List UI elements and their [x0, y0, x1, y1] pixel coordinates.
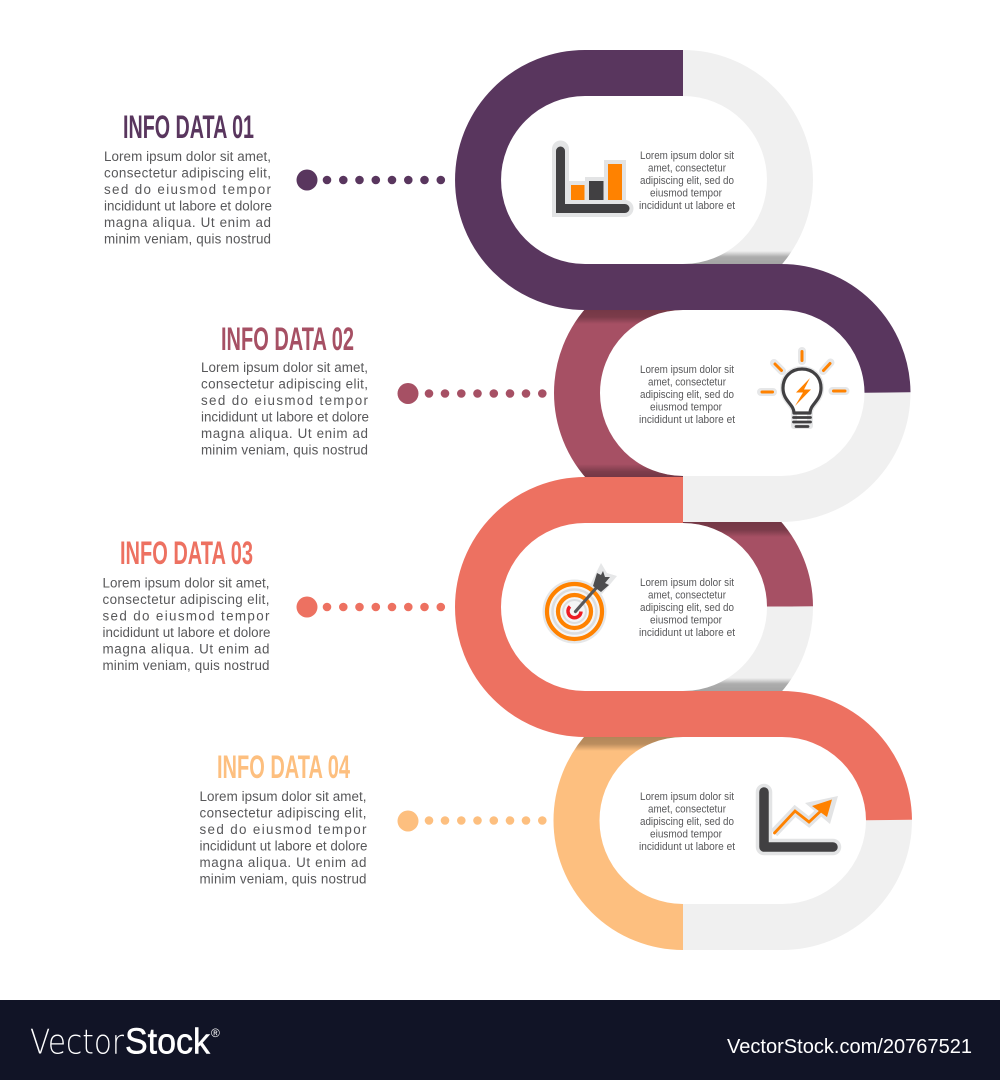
- winding timeline ribbon: [478, 73, 889, 927]
- footer logo bold part: Stock: [125, 1020, 211, 1062]
- description 03: [102, 576, 270, 673]
- body text 4: [639, 791, 735, 853]
- panel: step 4 centre: [639, 791, 838, 853]
- ribbon: peach left arc of step 4: [576, 714, 683, 927]
- description 04: [200, 789, 368, 886]
- description 04: consectetur adipiscing elit,: [200, 806, 366, 820]
- body text 4: amet, consectetur: [648, 804, 726, 816]
- body text 2: Lorem ipsum dolor sit: [640, 364, 734, 376]
- ribbon: grey lower right arc of step 2: [683, 392, 888, 499]
- ribbon: grey lower right arc of step 4: [683, 820, 889, 927]
- dotted connector 01: [296, 170, 445, 190]
- description 03: sed do eiusmod tempor: [102, 608, 270, 624]
- dotted connector 03: [296, 596, 445, 618]
- body text 1: Lorem ipsum dolor sit: [640, 150, 734, 162]
- description 04: sed do eiusmod tempor: [200, 822, 367, 837]
- description 01: [104, 149, 272, 246]
- shadow on rose right arc: [683, 500, 790, 606]
- ribbon: grey right arc of step 3: [683, 606, 790, 714]
- shadow on peach arc: [576, 714, 683, 927]
- heading 03: INFO DATA 03: [120, 535, 253, 571]
- body text 3: Lorem ipsum dolor sit: [640, 577, 734, 589]
- description 02: sed do eiusmod tempor: [201, 393, 369, 408]
- description 01: minim veniam, quis nostrud: [104, 232, 271, 246]
- description 02: Lorem ipsum dolor sit amet,: [201, 360, 368, 375]
- dotted connector 02: [398, 383, 547, 404]
- footer bar: [0, 1000, 1000, 1080]
- description 04: magna aliqua. Ut enim ad: [200, 855, 366, 870]
- ribbon: coral segment: [478, 500, 889, 820]
- shadow on grey arc 3: [683, 606, 790, 714]
- shadow at bottom of rose arc: [577, 287, 683, 499]
- panel: step 4 left text: [200, 749, 547, 886]
- description 03: Lorem ipsum dolor sit amet,: [102, 576, 270, 590]
- heading 01: INFO DATA 01: [123, 109, 254, 145]
- body text 3: eiusmod tempor: [650, 614, 722, 626]
- ribbon: purple segment: [478, 73, 888, 392]
- body text 2: amet, consectetur: [648, 376, 726, 388]
- description 03: minim veniam, quis nostrud: [102, 658, 270, 673]
- footer logo light part: Vector: [30, 1022, 124, 1062]
- body text 2: incididunt ut labore et: [639, 414, 735, 426]
- registered mark: ®: [211, 1026, 220, 1040]
- description 04: minim veniam, quis nostrud: [200, 872, 366, 886]
- body text 1: eiusmod tempor: [650, 188, 722, 200]
- icon: target with arrow: [542, 563, 617, 644]
- ribbon: rose right arc behind step 3: [683, 500, 790, 606]
- description 04: Lorem ipsum dolor sit amet,: [200, 789, 366, 804]
- body text 3: incididunt ut labore et: [639, 627, 735, 639]
- icon: light bulb: [761, 351, 846, 426]
- ribbon: grey right arc of step 1: [683, 73, 790, 287]
- description 01: incididunt ut labore et dolore: [104, 198, 272, 214]
- panel: step 1 left text: [104, 109, 445, 246]
- description 01: consectetur adipiscing elit,: [104, 166, 271, 180]
- body text 4: incididunt ut labore et: [639, 841, 735, 853]
- ribbon: rose left arc of step 2: [577, 287, 683, 499]
- description 03: incididunt ut labore et dolore: [102, 625, 270, 640]
- body text 1: adipiscing elit, sed do: [640, 175, 734, 187]
- description 02: consectetur adipiscing elit,: [201, 376, 368, 392]
- body text 2: eiusmod tempor: [650, 402, 722, 414]
- shadow on grey arc 1: [683, 73, 790, 287]
- body text 2: adipiscing elit, sed do: [640, 389, 734, 401]
- panel: step 2 left text: [201, 321, 547, 458]
- body text 2: [639, 364, 735, 426]
- description 02: minim veniam, quis nostrud: [201, 442, 368, 458]
- panel: step 3 left text: [102, 535, 445, 673]
- heading 02: INFO DATA 02: [221, 321, 354, 357]
- description 03: magna aliqua. Ut enim ad: [102, 642, 270, 656]
- body text 4: eiusmod tempor: [650, 828, 722, 840]
- description 01: Lorem ipsum dolor sit amet,: [104, 149, 271, 164]
- heading 04: INFO DATA 04: [217, 749, 350, 785]
- description 02: incididunt ut labore et dolore: [201, 410, 369, 424]
- body text 1: incididunt ut labore et: [639, 200, 735, 212]
- panel: step 3 centre: [542, 563, 735, 644]
- panel: step 1 centre: [560, 149, 735, 212]
- icon: growth chart: [764, 792, 838, 847]
- footer image id: VectorStock.com/20767521: [727, 1035, 972, 1058]
- body text 3: [639, 577, 735, 639]
- description 01: sed do eiusmod tempor: [104, 182, 272, 197]
- body text 3: adipiscing elit, sed do: [640, 602, 734, 614]
- description 02: magna aliqua. Ut enim ad: [201, 426, 368, 441]
- body text 4: Lorem ipsum dolor sit: [640, 791, 734, 803]
- panel: step 2 centre: [639, 351, 846, 426]
- icon: bar chart: [560, 149, 626, 208]
- description 02: [201, 360, 369, 458]
- dotted connector 04: [398, 810, 547, 832]
- description 01: magna aliqua. Ut enim ad: [104, 215, 271, 230]
- body text 4: adipiscing elit, sed do: [640, 816, 734, 828]
- shadow at top of rose arc: [577, 287, 683, 499]
- description 04: incididunt ut labore et dolore: [200, 838, 368, 854]
- body text 1: amet, consectetur: [648, 162, 726, 174]
- body text 3: amet, consectetur: [648, 590, 726, 602]
- body text 1: [639, 150, 735, 212]
- description 03: consectetur adipiscing elit,: [102, 592, 270, 607]
